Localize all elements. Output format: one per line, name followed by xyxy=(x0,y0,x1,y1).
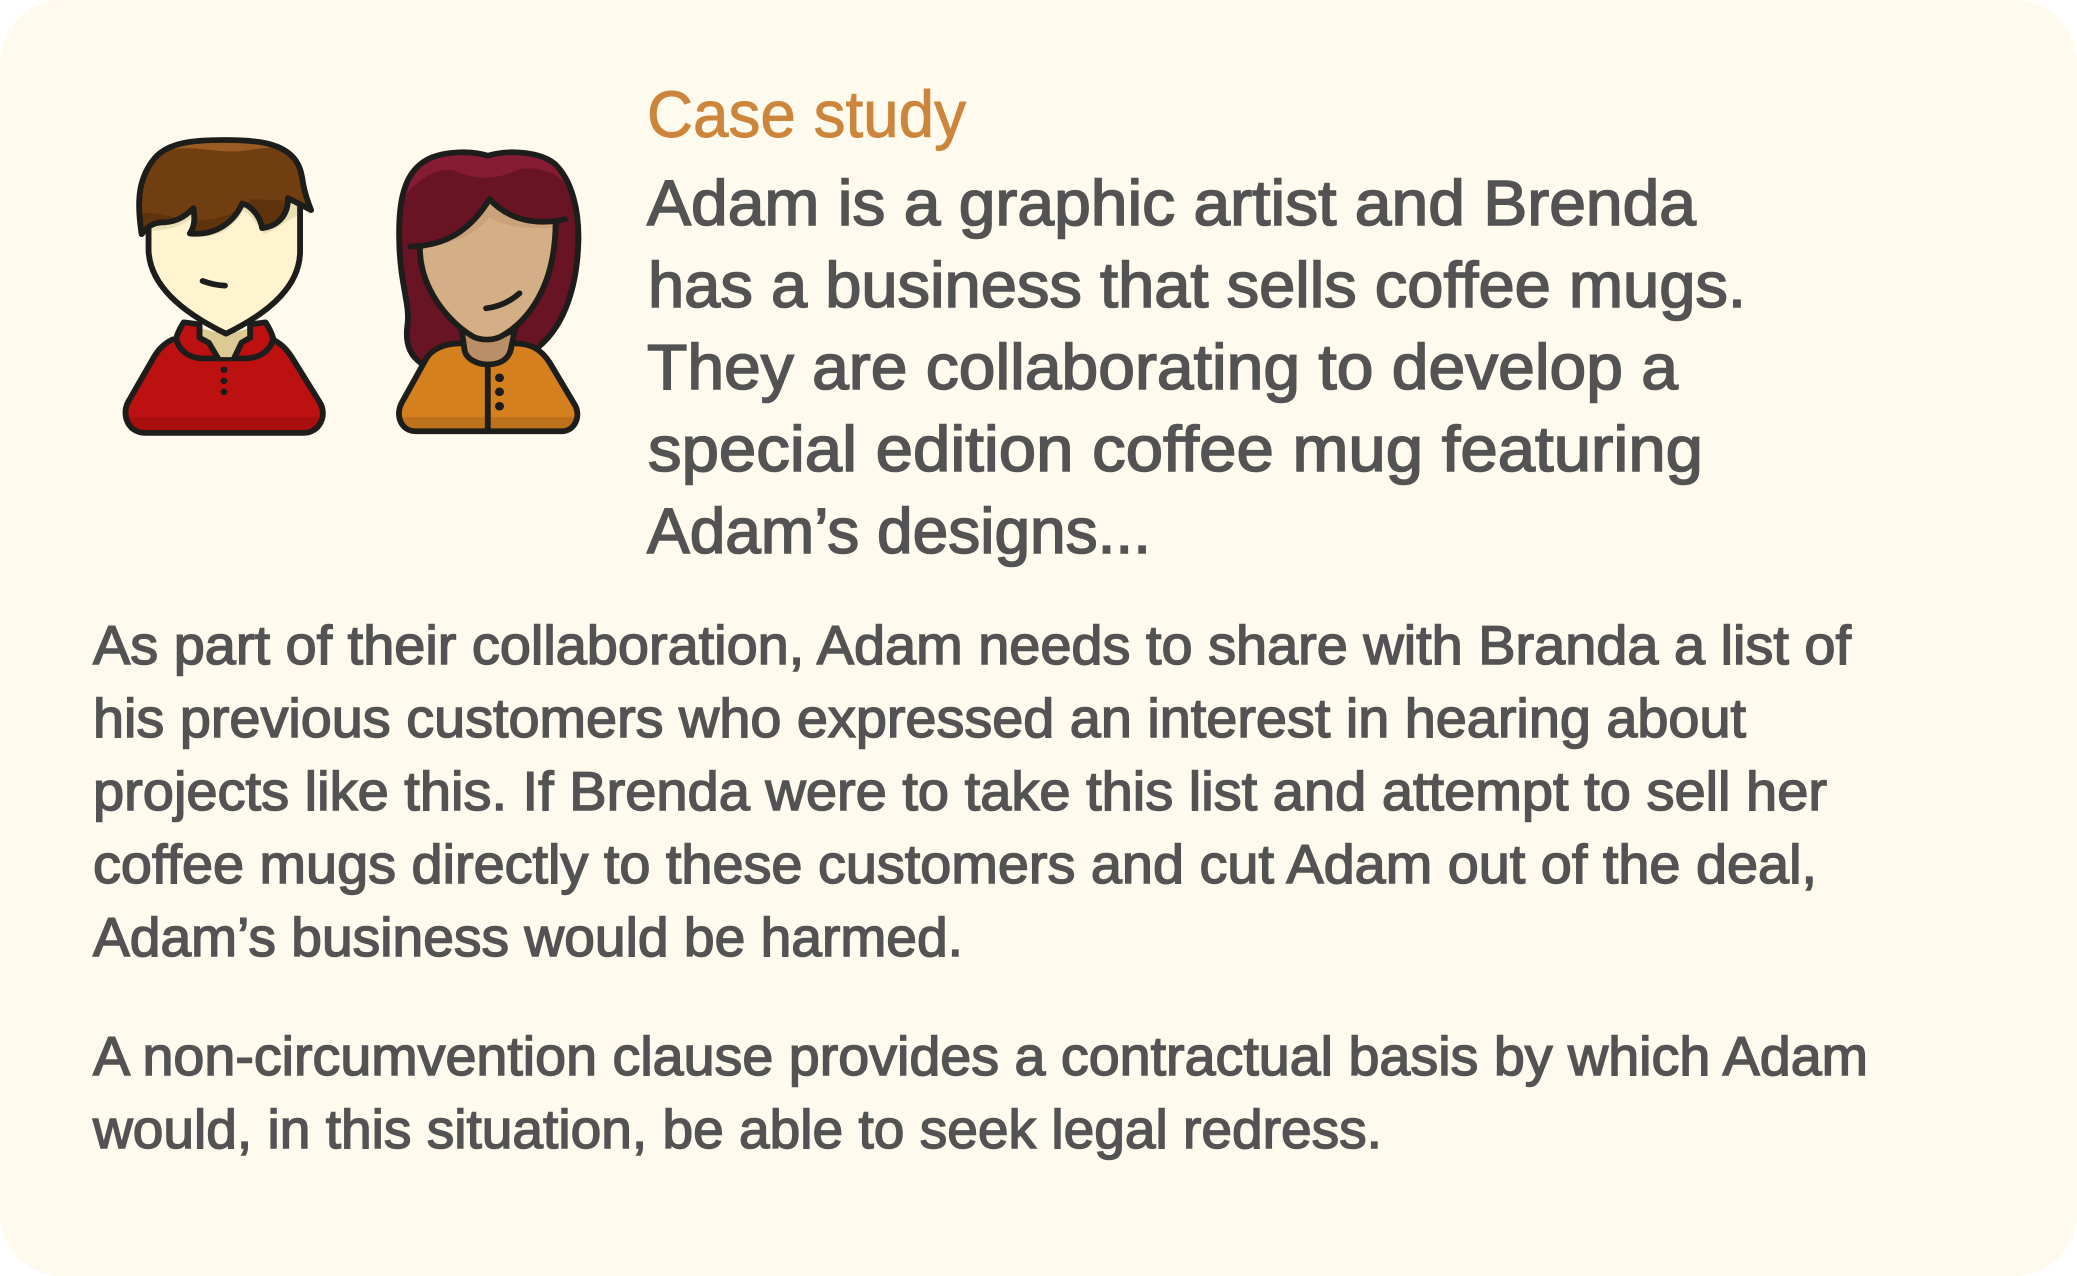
Adam shirt xyxy=(121,322,328,434)
text block: collaboration scenario xyxy=(93,614,1852,968)
text block: collaboration scenario: projects like this. If Brenda were to take this list and attempt to sell her xyxy=(93,760,1827,822)
text block: non-circumvention clause xyxy=(92,1025,1868,1160)
icon: Brenda avatar xyxy=(397,144,582,432)
text block: introduction: They are collaborating to develop a xyxy=(647,331,1678,403)
Adam face xyxy=(146,202,303,337)
Brenda jacket xyxy=(397,343,582,432)
text block: collaboration scenario: coffee mugs directly to these customers and cut Adam out of the deal, xyxy=(93,833,1817,895)
text block: introduction: Adam’s designs... xyxy=(647,495,1151,567)
text block: introduction: has a business that sells coffee mugs. xyxy=(648,249,1746,321)
heading: Case study: Case study xyxy=(647,77,966,151)
text block: non-circumvention clause: would, in this situation, be able to seek legal redress. xyxy=(92,1098,1382,1160)
Brenda face xyxy=(410,194,565,340)
Brenda hair xyxy=(397,144,582,363)
text block: non-circumvention clause: A non-circumvention clause provides a contractual basis by which Adam xyxy=(93,1025,1868,1087)
text block: collaboration scenario: As part of their collaboration, Adam needs to share with Branda a list of xyxy=(93,614,1852,676)
Brenda neck xyxy=(461,328,515,364)
text block: introduction: Adam is a graphic artist and Brenda xyxy=(647,167,1696,239)
text block: introduction: special edition coffee mug featuring xyxy=(648,413,1703,485)
icon: Adam avatar xyxy=(121,140,328,434)
Adam hair xyxy=(138,140,311,238)
text block: collaboration scenario: Adam’s business would be harmed. xyxy=(93,906,963,968)
text block: collaboration scenario: his previous customers who expressed an interest in hearing about xyxy=(93,687,1746,749)
text block: introduction xyxy=(647,167,1746,567)
